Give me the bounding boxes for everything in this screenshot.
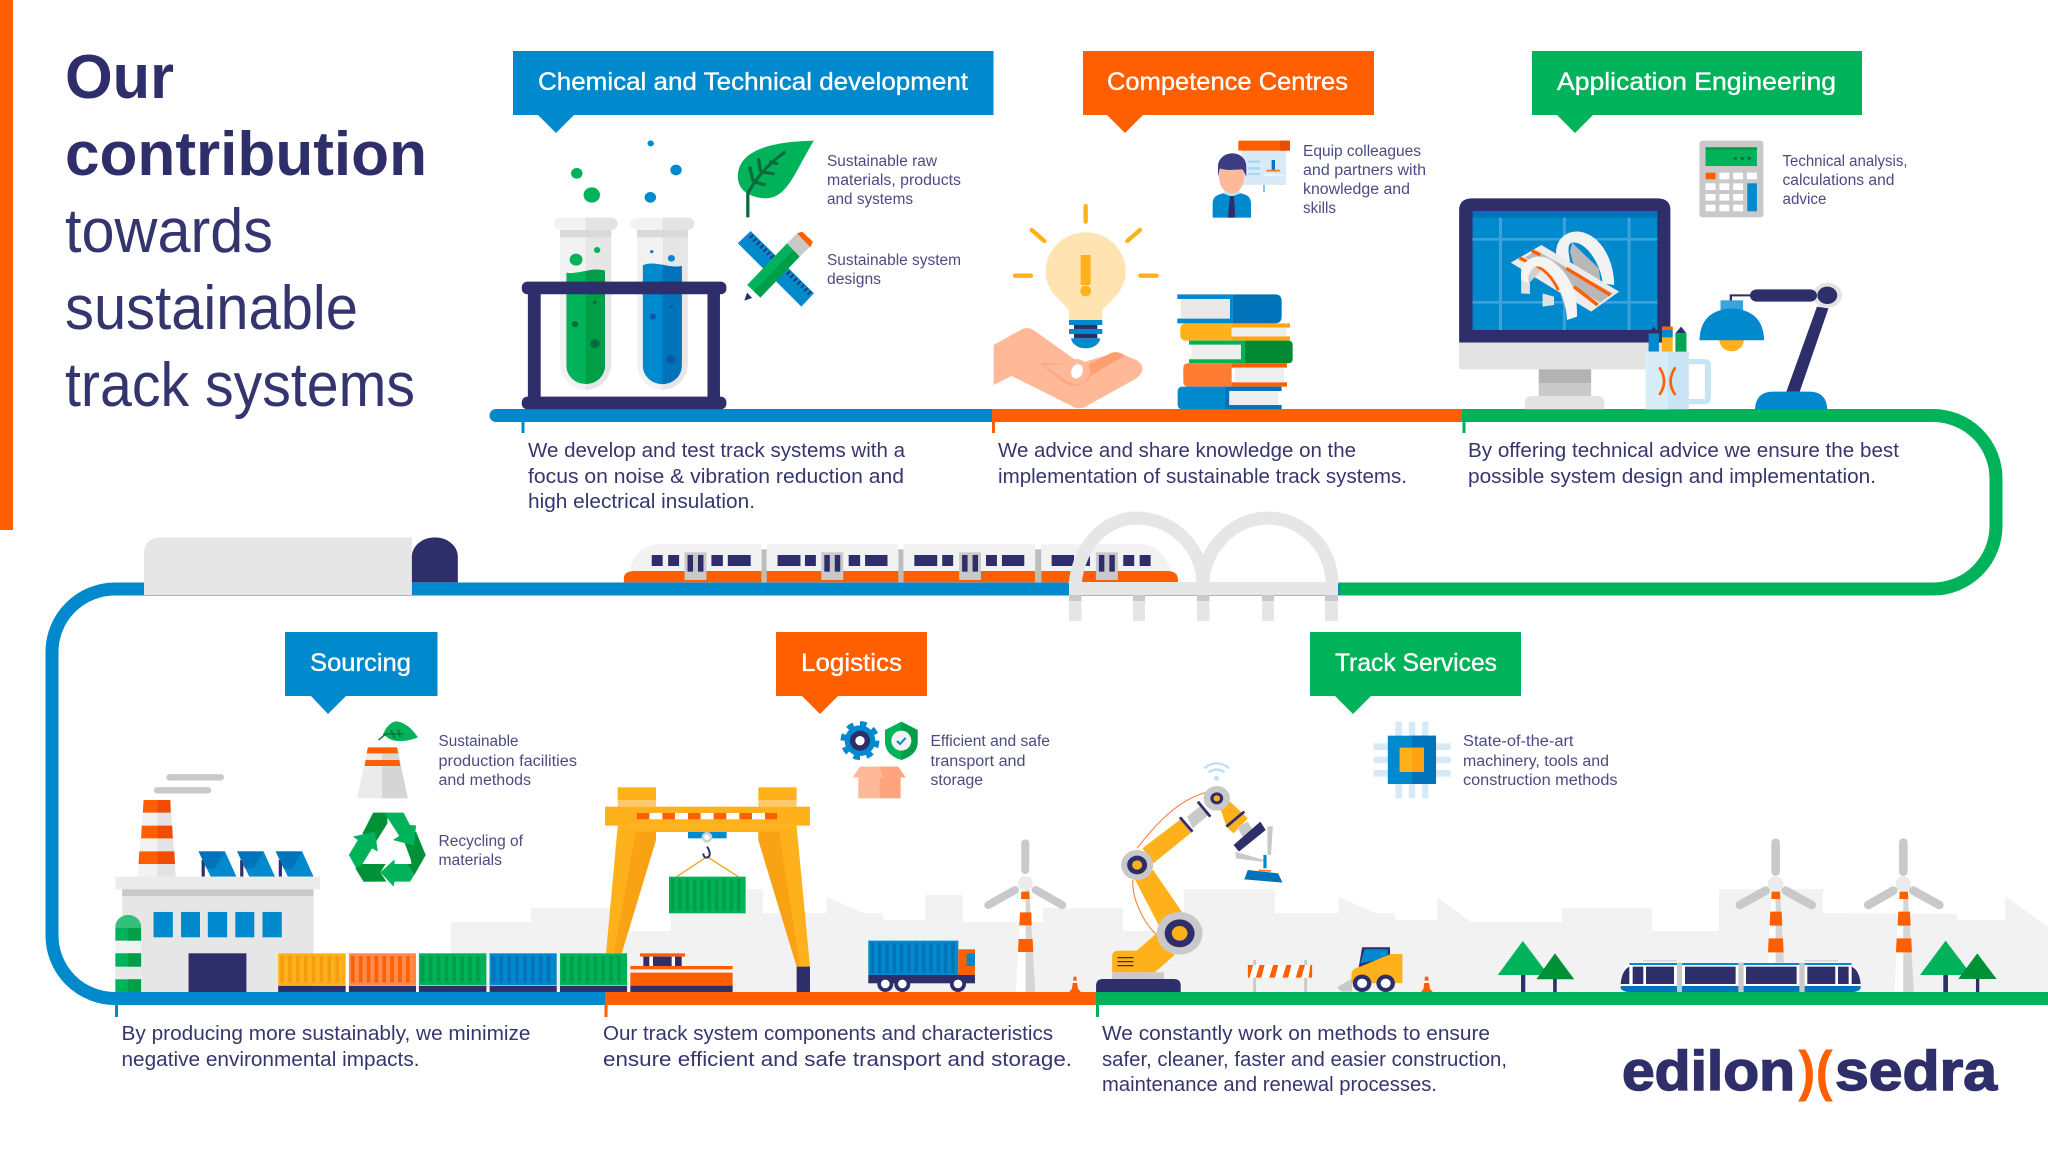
text: state-of-the-art machinery: construction methods	[1463, 772, 1618, 789]
text: state-of-the-art machinery: machinery, tools and	[1463, 753, 1609, 770]
icon: chimney with leaf	[357, 721, 418, 798]
text: state-of-the-art machinery: State-of-the-art	[1463, 733, 1574, 750]
text: sourcing description	[122, 1022, 530, 1071]
icon: gear, shield and box	[843, 722, 918, 798]
tram	[1621, 960, 1861, 992]
track line	[52, 416, 2048, 1017]
heading: track services: Track Services	[1335, 649, 1497, 677]
icon: calculator	[1699, 141, 1763, 217]
heading: chemical and technical development: Chemical and Technical development	[538, 68, 968, 96]
icon: desk lamp	[1699, 283, 1842, 409]
logo: edilon sedra	[1622, 1039, 1998, 1102]
city skyline background	[451, 889, 2048, 995]
text: sourcing description: By producing more sustainably, we minimize	[122, 1022, 530, 1045]
text: efficient and safe transport: storage	[930, 772, 983, 789]
icon: computer monitor with bridge design	[1459, 198, 1670, 409]
text: technical analysis	[1782, 153, 1908, 208]
icon: test tubes in rack	[522, 140, 726, 409]
robot arm	[1096, 763, 1282, 992]
title: sustainable	[65, 274, 358, 343]
traffic cone	[1421, 977, 1433, 992]
icon: ruler and pencil	[738, 231, 814, 307]
orange accent bar	[0, 0, 13, 530]
text: logistics description: ensure efficient and safe transport and storage.	[603, 1048, 1072, 1071]
text: sustainable raw materials: Sustainable raw	[827, 153, 938, 170]
text: equip colleagues	[1303, 143, 1426, 217]
text: recycling of materials	[438, 833, 524, 869]
text: efficient and safe transport	[930, 733, 1050, 789]
text: competence description: We advice and share knowledge on the	[998, 439, 1356, 462]
heading: track services	[1310, 632, 1521, 714]
heading: logistics: Logistics	[801, 649, 902, 677]
text: chemical description	[528, 439, 906, 513]
text: sustainable system designs: Sustainable system	[827, 252, 961, 269]
text: technical analysis: calculations and	[1782, 172, 1894, 189]
text: sustainable raw materials	[827, 153, 961, 208]
title: Our	[65, 43, 174, 112]
heading: sourcing: Sourcing	[310, 649, 411, 677]
text: track services description	[1102, 1022, 1507, 1096]
panel: competence centres	[994, 51, 1426, 488]
text: state-of-the-art machinery	[1463, 733, 1618, 789]
traffic cone	[1069, 977, 1081, 992]
text: equip colleagues: and partners with	[1303, 162, 1426, 179]
text: logistics description: Our track system components and characteristics	[603, 1022, 1053, 1045]
text: efficient and safe transport: Efficient and safe	[930, 733, 1050, 750]
title: track systems	[65, 351, 415, 420]
panel: logistics	[603, 632, 1081, 1071]
logo: edilon sedra: )(	[1798, 1039, 1833, 1102]
title: towards	[65, 197, 273, 266]
text: chemical description: focus on noise & vibration reduction and	[528, 465, 904, 488]
factory illustration	[115, 777, 320, 992]
text: recycling of materials: materials	[438, 852, 502, 869]
icon: mug with pencils	[1646, 327, 1708, 409]
panel: chemical and technical development	[513, 51, 994, 513]
wind turbine	[988, 843, 1062, 992]
text: application description: By offering technical advice we ensure the best	[1468, 439, 1899, 462]
shipping containers	[278, 953, 627, 992]
heading: competence centres: Competence Centres	[1107, 68, 1348, 96]
text: recycling of materials: Recycling of	[438, 833, 524, 850]
logo: edilon sedra: sedra	[1835, 1039, 1998, 1102]
trees	[1498, 941, 1574, 992]
heading: logistics	[776, 632, 927, 714]
icon: lightbulb over hand	[994, 206, 1157, 408]
boat	[630, 953, 733, 992]
tunnel	[144, 537, 458, 595]
text: equip colleagues: Equip colleagues	[1303, 143, 1421, 160]
heading: sourcing	[285, 632, 438, 714]
arched bridge	[1069, 518, 1338, 621]
text: competence description	[998, 439, 1407, 488]
title	[65, 43, 427, 420]
heading: application engineering	[1532, 51, 1862, 133]
text: equip colleagues: skills	[1303, 200, 1336, 217]
text: sustainable raw materials: and systems	[827, 191, 913, 208]
text: efficient and safe transport: transport and	[930, 753, 1026, 770]
panel: sourcing	[115, 632, 627, 1071]
text: sourcing description: negative environmental impacts.	[122, 1048, 420, 1071]
icon: recycling symbol	[349, 813, 426, 887]
text: equip colleagues: knowledge and	[1303, 181, 1410, 198]
road barrier	[1248, 960, 1312, 992]
icon: person with presentation board	[1213, 141, 1290, 218]
text: sustainable system designs	[827, 252, 961, 288]
text: sustainable production: Sustainable	[438, 733, 518, 750]
title: contribution	[65, 120, 427, 189]
wind turbines	[1740, 843, 1939, 992]
text: track services description: maintenance and renewal processes.	[1102, 1073, 1437, 1096]
panel: track services	[1096, 632, 1997, 1096]
heading: competence centres	[1083, 51, 1374, 133]
icon: processor chip	[1374, 722, 1451, 798]
text: sustainable production: production facilities	[438, 753, 577, 770]
text: sustainable production: and methods	[438, 772, 531, 789]
trees	[1920, 941, 1997, 992]
text: sustainable raw materials: materials, products	[827, 172, 961, 189]
logo: edilon sedra: edilon	[1622, 1039, 1795, 1102]
text: application description	[1468, 439, 1899, 488]
container truck	[868, 941, 975, 992]
text: chemical description: We develop and test track systems with a	[528, 439, 906, 462]
text: technical analysis: advice	[1782, 191, 1826, 208]
text: track services description: We constantly work on methods to ensure	[1102, 1022, 1490, 1045]
text: logistics description	[603, 1022, 1072, 1071]
gantry crane with container	[605, 787, 810, 992]
skid steer loader	[1337, 947, 1402, 992]
text: sustainable system designs: designs	[827, 271, 881, 288]
text: application description: possible system design and implementation.	[1468, 465, 1876, 488]
text: competence description: implementation of sustainable track systems.	[998, 465, 1407, 488]
heading: application engineering: Application Engineering	[1557, 68, 1836, 96]
metro train	[624, 544, 1178, 582]
text: technical analysis: Technical analysis,	[1782, 153, 1908, 170]
icon: green leaf	[738, 141, 814, 217]
heading: chemical and technical development	[513, 51, 994, 133]
panel: application engineering	[1459, 51, 1908, 488]
icon: stacked books	[1177, 294, 1293, 409]
text: chemical description: high electrical insulation.	[528, 490, 755, 513]
text: track services description: safer, cleaner, faster and easier construction,	[1102, 1048, 1507, 1071]
text: sustainable production	[438, 733, 577, 789]
